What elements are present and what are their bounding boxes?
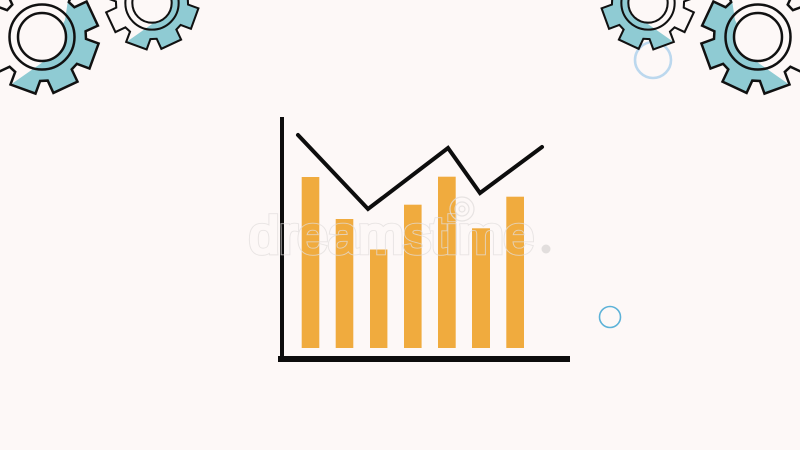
watermark	[249, 196, 550, 256]
decorative circle: small blue ring	[600, 306, 620, 328]
bars	[302, 177, 524, 348]
watermark spiral	[450, 197, 474, 221]
gear: top left small	[106, 0, 198, 49]
y axis	[280, 117, 284, 360]
gear: top right small	[602, 0, 694, 49]
watermark dot	[542, 244, 550, 254]
gear: top right large	[701, 0, 800, 94]
watermark lettering outline	[249, 213, 534, 256]
trend line	[298, 135, 542, 209]
x axis	[278, 356, 570, 362]
chart: bars with trend line	[278, 117, 570, 362]
gear: top left large	[0, 0, 99, 94]
decorative circle: large pale blue ring	[635, 42, 671, 78]
